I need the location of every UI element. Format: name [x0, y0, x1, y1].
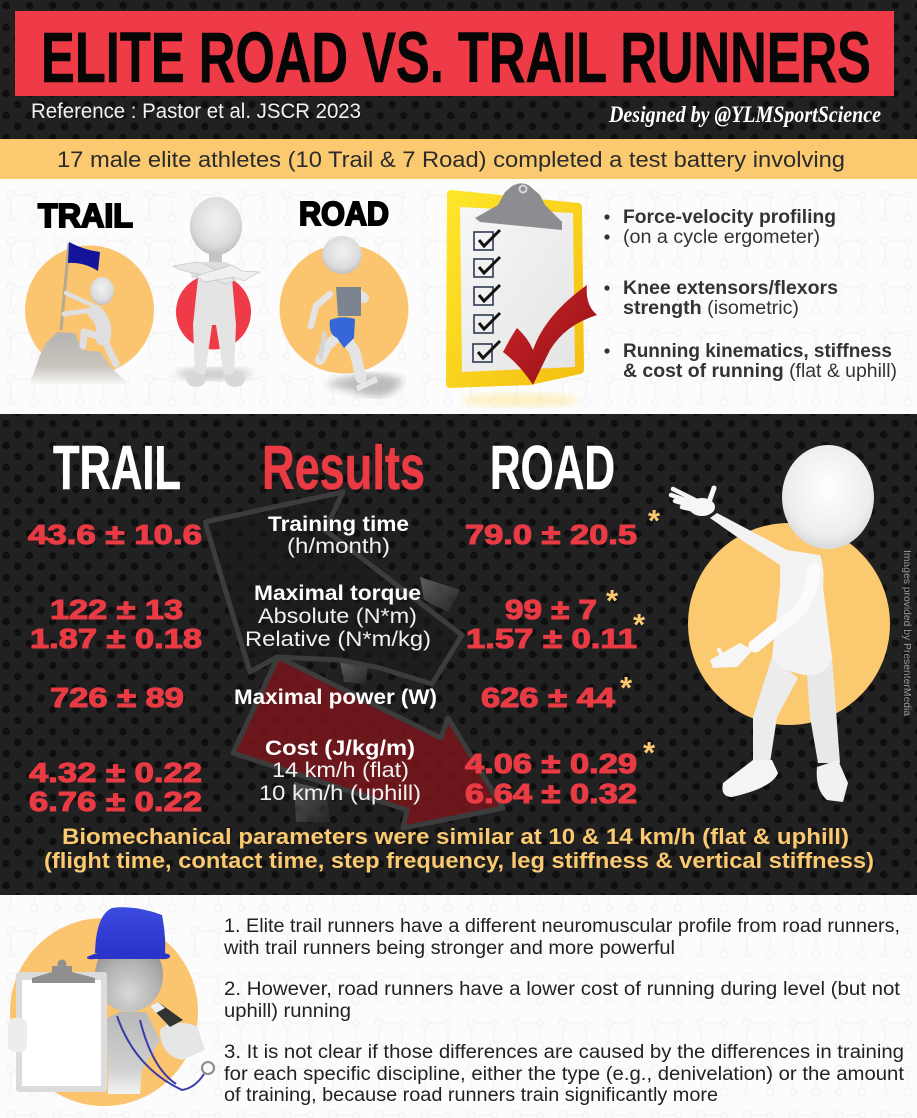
- significance asterisks: *: [620, 670, 633, 705]
- measure labels: Relative (N*m/kg): [245, 628, 431, 651]
- road values: 626 ± 44: [481, 682, 616, 713]
- panel: results: [0, 414, 917, 895]
- significance asterisks: [606, 503, 661, 770]
- conclusion text: 3. It is not clear if those differences are caused by the differences in training: [224, 1042, 904, 1063]
- checkboxes: [473, 232, 493, 362]
- biomechanics note: Biomechanical parameters were similar at 10 & 14 km/h (flat & uphill): [62, 824, 849, 849]
- measure labels: 14 km/h (flat): [272, 759, 409, 782]
- image credit: Images provided by PresenterMedia: [901, 550, 913, 716]
- measure labels: Maximal power (W): [234, 686, 437, 709]
- conclusion text: of training, because road runners train significantly more: [224, 1085, 718, 1106]
- trail values: 1.87 ± 0.18: [30, 623, 202, 654]
- icon: coach with clipboard and whistle: [8, 907, 214, 1106]
- designer credit: Designed by @YLMSportScience: [608, 102, 881, 127]
- road values: 79.0 ± 20.5: [465, 519, 637, 550]
- test list: Force-velocity profiling: [623, 207, 836, 228]
- measure labels: Cost (J/kg/m): [265, 737, 415, 760]
- measure labels: (h/month): [287, 535, 390, 558]
- conclusion text: uphill) running: [224, 1001, 351, 1022]
- heading: road column: ROAD: [490, 434, 615, 503]
- icon: road runner: [280, 236, 408, 397]
- trail values: 4.32 ± 0.22: [29, 757, 202, 788]
- road values: [465, 519, 637, 809]
- trail values: 726 ± 89: [50, 682, 184, 713]
- conclusion text: 1. Elite trail runners have a different neuromuscular profile from road runners,: [224, 916, 900, 937]
- icon: trail climber with flag: [25, 242, 154, 384]
- reference text: Reference : Pastor et al. JSCR 2023: [31, 100, 361, 123]
- heading: road: ROAD: [299, 195, 389, 232]
- icon: presenting white figure: [671, 445, 890, 802]
- panel: conclusions: [0, 895, 917, 1118]
- measure labels: Absolute (N*m): [258, 605, 417, 628]
- biomechanics note: [44, 824, 874, 873]
- biomechanics note: (flight time, contact time, step frequency, leg stiffness & vertical stiffness): [44, 848, 874, 873]
- test list: Knee extensors/flexors: [623, 278, 838, 299]
- conclusion text: for each specific discipline, either the type (e.g., denivelation) or the amount: [224, 1064, 905, 1085]
- subtitle band: [0, 139, 917, 179]
- road values: 4.06 ± 0.29: [465, 748, 637, 779]
- significance asterisks: *: [643, 735, 656, 770]
- road values: 6.64 ± 0.32: [465, 778, 637, 809]
- measure labels: Maximal torque: [254, 582, 421, 605]
- heading: trail column: TRAIL: [53, 434, 181, 503]
- conclusion text: [223, 916, 905, 1106]
- test list: (on a cycle ergometer): [623, 227, 820, 248]
- arrow: red down-right: [233, 657, 503, 828]
- measure labels: Training time: [268, 513, 409, 536]
- significance asterisks: *: [633, 607, 646, 642]
- significance asterisks: *: [606, 583, 619, 618]
- trail values: 6.76 ± 0.22: [29, 786, 202, 817]
- red check mark: [503, 285, 597, 385]
- trail values: 122 ± 13: [50, 594, 183, 625]
- icon: pointing figure on red circle: [173, 197, 260, 387]
- conclusion text: with trail runners being stronger and more powerful: [223, 938, 675, 959]
- icon: clipboard checklist: [450, 183, 597, 407]
- test list: & cost of running (flat & uphill): [623, 361, 897, 382]
- panel: study design: [0, 179, 917, 414]
- conclusion text: 2. However, road runners have a lower cost of running during level (but not: [224, 979, 901, 1000]
- test list: [604, 207, 897, 382]
- road values: 99 ± 7: [505, 594, 597, 625]
- test list: strength (isometric): [623, 298, 799, 319]
- test list: Running kinematics, stiffness: [623, 341, 892, 362]
- measure labels: 10 km/h (uphill): [259, 782, 421, 805]
- heading: trail: TRAIL: [38, 197, 133, 234]
- arrow: gray up-left: [205, 492, 462, 684]
- measure labels: [234, 513, 437, 805]
- panel: header background: [0, 0, 917, 139]
- trail values: [28, 519, 202, 817]
- road values: 1.57 ± 0.11: [466, 623, 637, 654]
- trail values: 43.6 ± 10.6: [28, 519, 202, 550]
- subtitle band: 17 male elite athletes (10 Trail & 7 Road) completed a test battery involving: [57, 147, 845, 172]
- significance asterisks: *: [648, 503, 661, 538]
- heading: results: Results: [262, 434, 425, 503]
